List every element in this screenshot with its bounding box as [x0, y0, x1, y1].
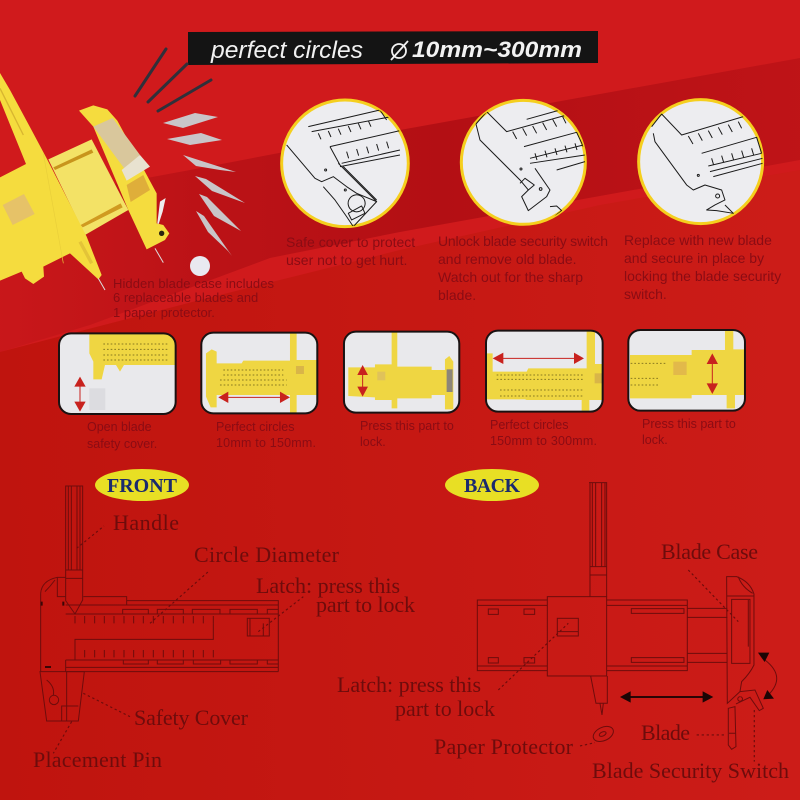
label: back latch: Latch: press this — [337, 672, 481, 697]
circle 3: replace blade illustration — [639, 100, 763, 224]
caption: press part right: lock. — [642, 433, 668, 447]
banner: perfect circles size range: 10mm~300mm — [412, 37, 582, 62]
caption: step 2: Unlock blade security switch — [438, 233, 608, 249]
label: front latch: part to lock — [316, 592, 415, 617]
circle 1: safety cover illustration — [282, 100, 408, 227]
banner: perfect circles size range — [188, 31, 598, 65]
label: Paper Protector: Paper Protector — [434, 734, 574, 759]
label: Circle Diameter: Circle Diameter — [194, 542, 340, 567]
label: Placement Pin: Placement Pin — [33, 747, 162, 772]
banner: perfect circles size range: perfect circles — [210, 37, 363, 64]
caption: step 1: Safe cover to protect — [286, 234, 415, 250]
caption: step 3: and secure in place by — [624, 250, 764, 266]
blades: dark pins and silver blades — [135, 49, 245, 276]
caption: press part: Press this part to — [360, 419, 454, 433]
card: perfect circles 150mm to 300mm — [486, 331, 603, 412]
caption: step 3: switch. — [624, 286, 667, 302]
card: press to lock right — [628, 330, 745, 411]
caption: step 3: Replace with new blade — [624, 232, 772, 248]
badge: BACK: BACK — [464, 475, 520, 497]
label: Handle: Handle — [113, 510, 179, 535]
label: Blade Case: Blade Case — [661, 539, 758, 564]
badge: FRONT — [95, 469, 189, 501]
card: press to lock left — [344, 332, 459, 413]
callout: hidden blade case: 1 paper protector. — [113, 305, 215, 320]
caption: 10mm to 150mm: Perfect circles — [216, 420, 294, 434]
badge: FRONT: FRONT — [107, 475, 178, 497]
caption: step 2: and remove old blade. — [438, 251, 577, 267]
caption: step 2: blade. — [438, 287, 476, 303]
caption: step 1: user not to get hurt. — [286, 252, 407, 268]
caption: open blade: Open blade — [87, 420, 152, 434]
caption: 10mm to 150mm: 10mm to 150mm. — [216, 436, 316, 450]
circle 2: unlock blade switch illustration — [461, 100, 585, 224]
label: Blade Security Switch: Blade Security Switch — [592, 758, 789, 783]
label: Blade: Blade — [641, 720, 690, 745]
badge: BACK — [445, 469, 539, 501]
caption: press part right: Press this part to — [642, 417, 736, 431]
label: Safety Cover: Safety Cover — [134, 705, 249, 730]
diagram: back view — [477, 483, 777, 762]
caption: step 2: Watch out for the sharp — [438, 269, 583, 285]
caption: 150mm to 300mm: Perfect circles — [490, 418, 568, 432]
caption: press part: lock. — [360, 435, 386, 449]
caption: step 3: locking the blade security — [624, 268, 781, 284]
diagram: front view — [40, 486, 303, 753]
label: front latch: Latch: press this — [256, 573, 400, 598]
card: perfect circles 10mm to 150mm — [201, 333, 317, 413]
caption: 150mm to 300mm: 150mm to 300mm. — [490, 434, 597, 448]
card: open blade safety cover — [59, 333, 176, 414]
label: back latch: part to lock — [395, 696, 495, 721]
callout: hidden blade case: 6 replaceable blades and — [113, 290, 258, 305]
caption: open blade: safety cover. — [87, 437, 157, 451]
callout: hidden blade case: Hidden blade case includes — [113, 276, 274, 291]
photo: yellow circle cutter with blade case — [0, 73, 169, 290]
